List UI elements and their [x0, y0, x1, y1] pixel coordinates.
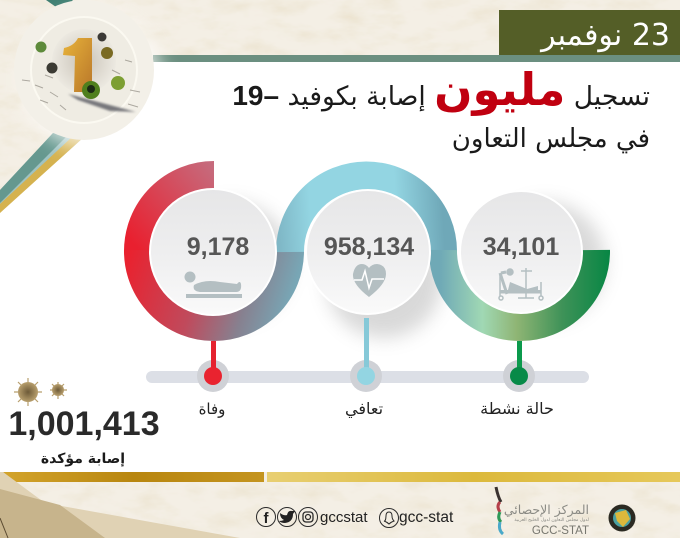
- icon: patient on bed: [184, 272, 242, 298]
- timeline marker: deaths: [197, 358, 229, 392]
- social icons: f: [264, 510, 270, 527]
- gold strip: [3, 472, 680, 482]
- panel: active cases: [460, 191, 582, 313]
- icon: heart with pulse: [353, 264, 386, 297]
- emblem: golden number one with viruses: [14, 0, 162, 150]
- title: [232, 63, 650, 154]
- logo ribbon: [496, 487, 503, 534]
- label: active cases: حالة نشطة: [480, 399, 554, 418]
- white content panel: [0, 62, 680, 472]
- GCC-STAT logo: [496, 487, 589, 537]
- header bar: [153, 55, 680, 62]
- date box: [499, 10, 680, 55]
- panel: recoveries: [306, 190, 430, 314]
- deaths value: 9,178: [187, 233, 249, 261]
- social icons: [256, 508, 318, 527]
- total confirmed cases: 1,001,413: [8, 405, 160, 443]
- title: تسجيل مليون إصابة بكوفيد –19: [232, 63, 650, 116]
- GCC-STAT logo: GCC-STAT: [532, 525, 589, 537]
- ribbon shadow: [171, 202, 605, 338]
- handle: gcc-stat: gcc-stat: [399, 509, 454, 526]
- recoveries value: 958,134: [324, 233, 414, 261]
- GCC-STAT logo: لدول مجلس التعاون لدول الخليج العربية: [514, 518, 589, 523]
- stems: [211, 318, 522, 374]
- title: في مجلس التعاون: [452, 124, 650, 154]
- timeline bar: [146, 371, 589, 383]
- timeline marker: active cases: [503, 358, 535, 392]
- label: recoveries: تعافي: [345, 399, 383, 419]
- total caption: إصابة مؤكدة: [41, 451, 125, 467]
- corner ribbon: teal and gold diagonal: [0, 0, 84, 213]
- GCC emblem: [608, 504, 636, 532]
- icon: snapchat: [380, 508, 398, 528]
- handle: gccstat: gccstat: [320, 509, 368, 526]
- footer corner shapes: [0, 472, 240, 538]
- timeline marker: recoveries: [350, 358, 382, 392]
- icon: hospital bed: [499, 268, 543, 300]
- GCC-STAT logo: المركز الإحصائي: [504, 502, 589, 518]
- total confirmed cases: [8, 405, 160, 467]
- ribbon: connected arcs: [138, 175, 596, 327]
- footer band: [0, 482, 680, 538]
- panel: deaths: [150, 189, 276, 315]
- icon: virus pair: [14, 378, 67, 406]
- label: deaths: وفاة: [199, 400, 225, 418]
- date box: 23 نوفمبر: [539, 18, 670, 53]
- active cases value: 34,101: [483, 233, 559, 261]
